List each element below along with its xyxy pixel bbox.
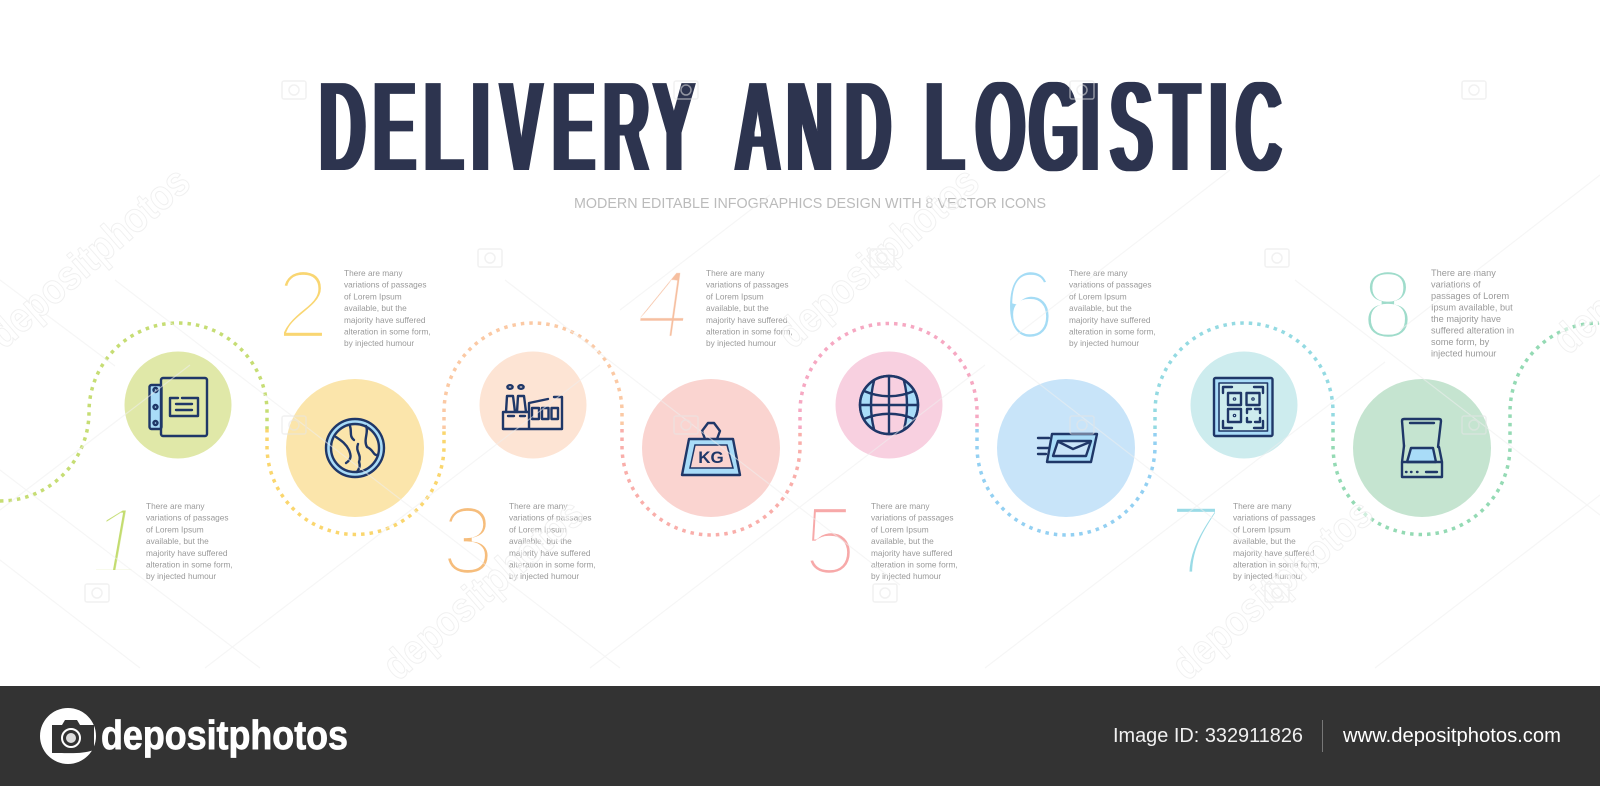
text block 7: alteration in some form,	[1233, 560, 1320, 570]
text block 1: There are many	[146, 501, 205, 511]
number 4: 4	[630, 250, 699, 359]
icon: binder book	[150, 378, 207, 436]
text block 8: some form, by	[1431, 337, 1490, 347]
text block 6: available, but the	[1069, 303, 1132, 313]
text block 6: by injected humour	[1069, 338, 1139, 348]
text block 6: There are many	[1069, 268, 1128, 278]
text block 1: of Lorem Ipsum	[146, 524, 204, 534]
text block 8: There are many	[1431, 268, 1496, 278]
watermark overlay	[0, 81, 1600, 689]
text block 2: by injected humour	[344, 338, 414, 348]
text block 5: majority have suffered	[871, 548, 953, 558]
footer logo	[40, 708, 348, 764]
text block 7: available, but the	[1233, 536, 1296, 546]
text block 1: alteration in some form,	[146, 560, 233, 570]
image id: Image ID: 332911826	[1113, 725, 1303, 747]
text block 4: by injected humour	[706, 338, 776, 348]
text block 4: available, but the	[706, 303, 769, 313]
text block 5: variations of passages	[871, 513, 954, 523]
text block 1: available, but the	[146, 536, 209, 546]
text block 3: by injected humour	[509, 571, 579, 581]
text block 3: variations of passages	[509, 513, 592, 523]
watermark overlay: depositphotos	[373, 489, 593, 689]
step 4 circle	[642, 379, 780, 517]
text block 1: majority have suffered	[146, 548, 228, 558]
number 7: 7	[1169, 486, 1223, 595]
watermark overlay: depositphotos	[1162, 489, 1382, 689]
text block 2: There are many	[344, 268, 403, 278]
text block 4: variations of passages	[706, 280, 789, 290]
text block 2: alteration in some form,	[344, 326, 431, 336]
number 1: 1	[81, 488, 154, 596]
text block 2: of Lorem Ipsum	[344, 291, 402, 301]
icon: flying envelope	[1038, 434, 1097, 462]
icon: factory	[503, 385, 562, 429]
text block 8: the majority have	[1431, 314, 1501, 324]
icon: earth	[326, 419, 384, 477]
text block 7: by injected humour	[1233, 571, 1303, 581]
text block 5: by injected humour	[871, 571, 941, 581]
text block 2: available, but the	[344, 303, 407, 313]
step 5 circle	[836, 352, 942, 458]
text block 6: of Lorem Ipsum	[1069, 291, 1127, 301]
number 5: 5	[803, 486, 857, 595]
step 7 circle	[1190, 352, 1298, 458]
text block 7: majority have suffered	[1233, 548, 1315, 558]
text block 4: majority have suffered	[706, 315, 788, 325]
text block 6: majority have suffered	[1069, 315, 1151, 325]
icon: kilogram weight	[682, 423, 740, 475]
step 6 circle	[997, 379, 1135, 517]
text block 4: There are many	[706, 268, 765, 278]
text block 8: variations of	[1431, 280, 1481, 290]
text block 3: alteration in some form,	[509, 560, 596, 570]
text block 8: suffered alteration in	[1431, 326, 1514, 336]
subtitle: MODERN EDITABLE INFOGRAPHICS DESIGN WITH 8 VECTOR ICONS	[574, 196, 1046, 212]
number 2: 2	[276, 250, 330, 359]
text block 2: variations of passages	[344, 280, 427, 290]
text block 4: alteration in some form,	[706, 326, 793, 336]
text block 1: variations of passages	[146, 513, 229, 523]
text block 2: majority have suffered	[344, 315, 426, 325]
text block 3: majority have suffered	[509, 548, 591, 558]
step 1 circle	[124, 352, 232, 458]
icon: globe grid	[860, 376, 918, 434]
text block 8: injected humour	[1431, 348, 1496, 358]
text block 7: of Lorem Ipsum	[1233, 524, 1291, 534]
step 2 circle	[286, 379, 424, 517]
text block 5: of Lorem Ipsum	[871, 524, 929, 534]
number 3: 3	[441, 486, 495, 595]
text block 5: There are many	[871, 501, 930, 511]
text block 6: variations of passages	[1069, 280, 1152, 290]
website url: www.depositphotos.com	[1342, 725, 1561, 747]
icon: qr code scan	[1214, 378, 1272, 436]
icon: kilogram weight: KG	[698, 448, 724, 467]
text block 8: passages of Lorem	[1431, 291, 1509, 301]
text block 3: of Lorem Ipsum	[509, 524, 567, 534]
icon: scanner	[1402, 419, 1442, 477]
text block 3: available, but the	[509, 536, 572, 546]
text block 3: There are many	[509, 501, 568, 511]
step 3 circle	[480, 352, 586, 458]
number 6: 6	[1002, 250, 1056, 359]
text block 8: Ipsum available, but	[1431, 302, 1513, 312]
number 8: 8	[1361, 250, 1415, 359]
title: DELIVERYANDLOGISTIC	[320, 52, 1282, 200]
text block 4: of Lorem Ipsum	[706, 291, 764, 301]
dotted connector path	[0, 323, 1599, 535]
text block 5: available, but the	[871, 536, 934, 546]
step 8 circle	[1353, 379, 1491, 517]
footer bar	[0, 686, 1600, 786]
text block 6: alteration in some form,	[1069, 326, 1156, 336]
footer logo: depositphotos	[101, 712, 348, 758]
text block 7: There are many	[1233, 501, 1292, 511]
text block 5: alteration in some form,	[871, 560, 958, 570]
watermark overlay: depositphotos	[768, 157, 988, 357]
text block 7: variations of passages	[1233, 513, 1316, 523]
text block 1: by injected humour	[146, 571, 216, 581]
footer divider	[1322, 720, 1323, 752]
